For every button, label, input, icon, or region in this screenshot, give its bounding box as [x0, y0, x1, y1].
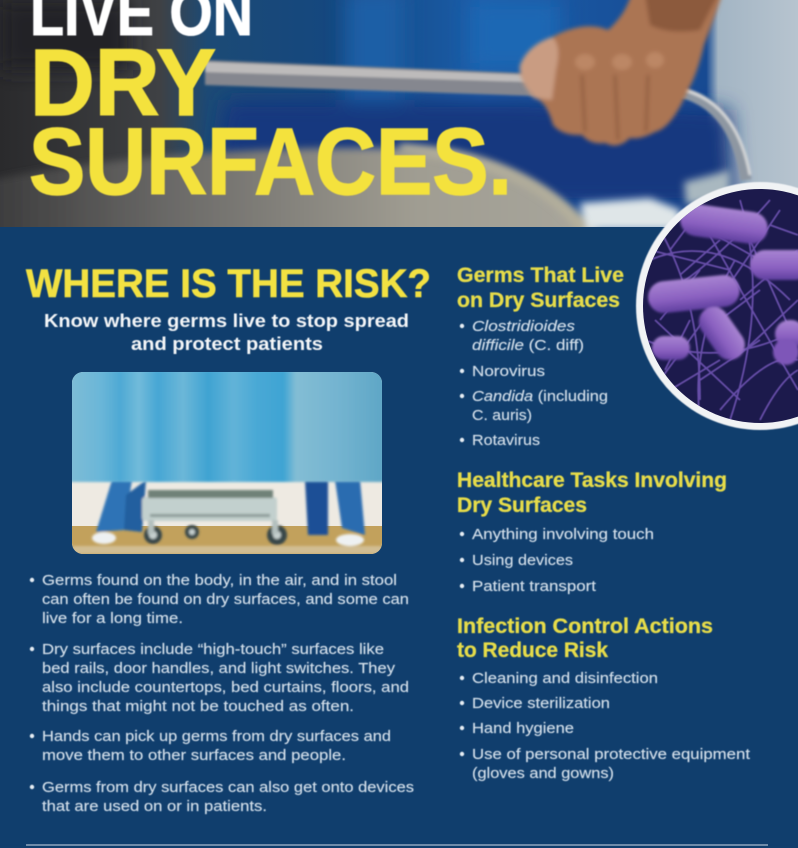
task list	[460, 527, 654, 595]
action list: Hand hygiene	[472, 721, 574, 737]
hand	[520, 0, 722, 146]
section: germs that live on dry surfaces	[457, 264, 624, 449]
germ list: Clostridioides	[472, 319, 575, 335]
section heading: Dry Surfaces	[457, 494, 587, 517]
action list: Cleaning and disinfection	[472, 671, 658, 687]
title line: SURFACES.: SURFACES.	[29, 109, 512, 215]
task list: Patient transport	[472, 579, 596, 595]
germ list: Rotavirus	[472, 433, 540, 449]
section: infection control actions	[457, 615, 750, 782]
heading: where is the risk: WHERE IS THE RISK?	[26, 262, 431, 306]
bullet 3: Hands can pick up germs from dry surfaces and	[42, 729, 391, 745]
bullet 2: things that might not be touched as often.	[42, 699, 354, 715]
section heading	[457, 264, 624, 312]
section heading: Healthcare Tasks Involving	[457, 469, 727, 492]
right column	[457, 264, 750, 782]
germ list: Candida (including	[472, 389, 608, 405]
bullet 2	[30, 642, 409, 715]
bullet 4: Germs from dry surfaces can also get onto devices	[42, 780, 414, 796]
legs	[96, 480, 132, 532]
section heading	[457, 469, 727, 517]
bullet 2: also include countertops, bed curtains, floors, and	[42, 680, 409, 696]
section heading: Infection Control Actions	[457, 615, 713, 638]
germ list: Norovirus	[472, 364, 545, 380]
title line: DRY: DRY	[30, 30, 216, 136]
left bullet list	[30, 573, 414, 815]
filaments	[645, 200, 798, 420]
action list: (gloves and gowns)	[472, 766, 614, 782]
stretcher	[142, 497, 277, 521]
section heading	[457, 615, 713, 662]
bullet 2: bed rails, door handles, and light switches. They	[42, 661, 396, 677]
bullet 3: move them to other surfaces and people.	[42, 748, 346, 764]
bed rail	[205, 60, 750, 180]
bacteria rods	[646, 202, 798, 366]
bullet 4	[30, 780, 414, 815]
subheading	[44, 310, 409, 354]
section: healthcare tasks	[457, 469, 727, 595]
task list: Using devices	[472, 553, 573, 569]
circular micrograph of bacteria	[630, 180, 798, 430]
action list: Device sterilization	[472, 696, 610, 712]
bullet 1: live for a long time.	[42, 611, 183, 627]
task list: Anything involving touch	[472, 527, 654, 543]
bullet 1: Germs found on the body, in the air, and in stool	[42, 573, 397, 589]
section heading: on Dry Surfaces	[457, 289, 620, 312]
section heading: Germs That Live	[457, 264, 624, 287]
bullet 1	[30, 573, 409, 627]
bullet 4: that are used on or in patients.	[42, 799, 267, 815]
subheading: and protect patients	[131, 333, 323, 354]
subheading: Know where germs live to stop spread	[44, 310, 409, 331]
photo: hospital curtain and stretcher	[70, 370, 384, 554]
action list	[460, 671, 750, 782]
action list: Use of personal protective equipment	[472, 747, 750, 763]
germ list: C. auris)	[472, 408, 532, 424]
germ list	[460, 319, 608, 449]
bullet 1: can often be found on dry surfaces, and some can	[42, 592, 409, 608]
bullet 3	[30, 729, 391, 764]
section heading: to Reduce Risk	[457, 639, 608, 662]
bullet 2: Dry surfaces include “high-touch” surfaces like	[42, 642, 384, 658]
header photo: hand on bed rail	[0, 0, 798, 240]
germ list: difficile (C. diff)	[472, 338, 584, 354]
left column	[26, 262, 431, 354]
footer rule	[26, 844, 768, 846]
title	[29, 0, 512, 215]
